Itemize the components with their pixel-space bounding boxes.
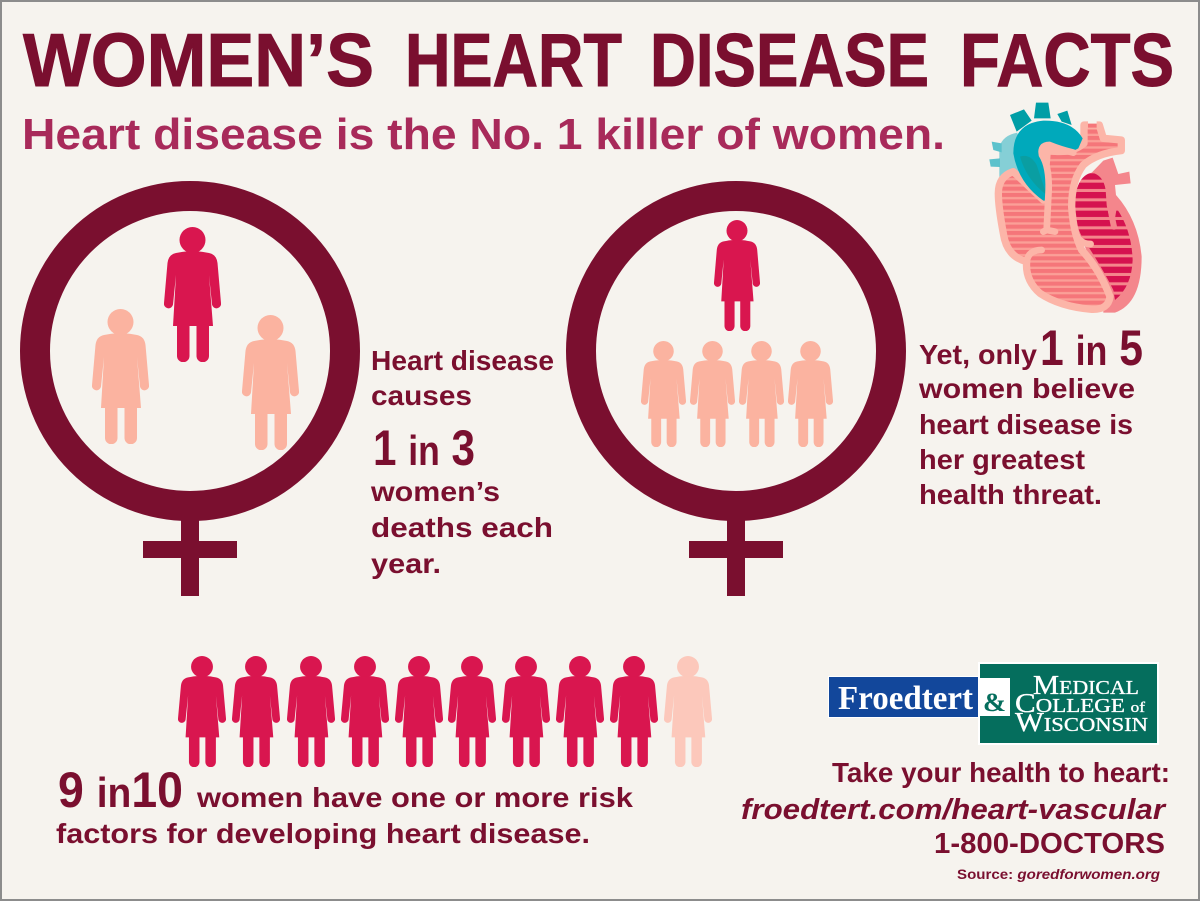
contact text: Source: goredforwomen.org — [957, 867, 1161, 882]
text: 9 in 10 women — [56, 762, 633, 849]
person right — [242, 315, 299, 450]
title: HEART — [405, 18, 622, 102]
logo: Froedtert and Medical College of Wisconsin: WISCONSIN — [1015, 707, 1148, 737]
panel: 1 in 5 — [581, 196, 1143, 596]
panel: 9 in 10 — [56, 656, 712, 849]
group of four people — [641, 341, 833, 447]
text: 1 in 5 women: 1 in 5 — [1040, 320, 1143, 376]
text: 1 in 3 deaths: causes — [371, 380, 472, 411]
logo: Froedtert and Medical College of Wisconsin: MEDICAL — [1033, 670, 1139, 700]
text: 1 in 3 deaths: year. — [371, 548, 441, 579]
text: 1 in 3 deaths — [370, 345, 554, 579]
person highlighted — [164, 227, 221, 362]
text: 9 in 10 women: 9 in10 — [58, 762, 183, 818]
title — [23, 18, 1174, 102]
logo: Froedtert and Medical College of Wisconsin — [828, 662, 1159, 745]
logo: Froedtert and Medical College of Wisconsin: Froedtert — [838, 680, 974, 717]
female symbol ring left — [35, 196, 345, 596]
logo: Froedtert and Medical College of Wisconsin: COLLEGE of — [1015, 688, 1145, 718]
subtitle: Heart disease is the No. 1 killer of women. — [22, 110, 945, 159]
text: 1 in 5 women: her greatest — [919, 444, 1085, 475]
text: 9 in 10 women: factors for developing heart disease. — [56, 818, 590, 849]
panel: 1 in 3 — [35, 196, 554, 596]
logo: Froedtert and Medical College of Wisconsin: & — [983, 688, 1006, 717]
contact text: Take your health to heart: — [832, 757, 1170, 788]
text: 1 in 3 deaths: deaths each — [371, 512, 553, 543]
text: 1 in 5 women: Yet, only — [919, 339, 1037, 370]
text: 1 in 5 women: heart disease is — [919, 409, 1133, 440]
contact text: 1-800-DOCTORS — [934, 828, 1165, 860]
text: 1 in 5 women: women believe — [918, 373, 1135, 404]
text: 1 in 3 deaths: 1 in 3 — [373, 420, 475, 476]
title: FACTS — [960, 18, 1174, 102]
text: 1 in 5 women — [918, 320, 1143, 510]
female symbol ring right — [581, 196, 891, 596]
text: 9 in 10 women: women have one or more risk — [196, 782, 633, 813]
text: 1 in 3 deaths: women’s — [370, 476, 500, 507]
icon: heart illustration — [989, 103, 1142, 313]
contact text: froedtert.com/heart-vascular — [741, 794, 1167, 826]
contact text — [741, 757, 1170, 882]
person left — [92, 309, 149, 444]
title: DISEASE — [650, 18, 929, 102]
person highlighted — [714, 220, 760, 331]
row of ten people — [178, 656, 712, 767]
text: 1 in 3 deaths: Heart disease — [371, 345, 554, 376]
title: WOMEN’S — [23, 18, 374, 102]
text: 1 in 5 women: health threat. — [919, 479, 1102, 510]
